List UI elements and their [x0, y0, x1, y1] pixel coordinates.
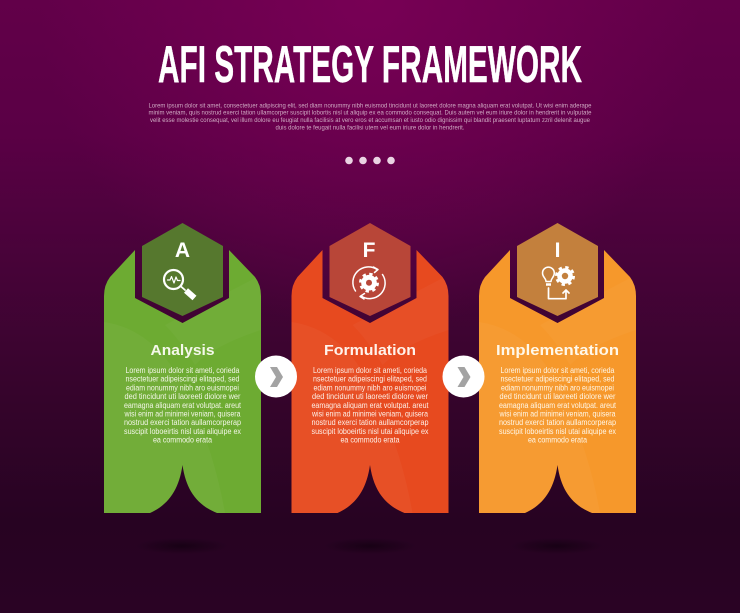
body text: eamagna aliquam erat volutpat. areut — [499, 401, 617, 410]
icon: magnifier — [164, 270, 194, 298]
arrow: Analysis to Formulation — [255, 356, 297, 398]
body text: Lorem ipsum dolor sit ameti, corieda — [126, 366, 240, 375]
body text — [311, 366, 429, 445]
intro paragraph: velit esse molestie consequat, vel illum dolore eu feugiat nulla facilisis at vero eros et accumsan et iusto odio dignissim qui blandit praesent luptatum zzril delenit augue — [150, 117, 590, 124]
intro paragraph — [148, 102, 592, 132]
body text: Lorem ipsum dolor sit ameti, corieda — [313, 366, 427, 375]
body text: ded tincidunt uti laoreeti diolore wer — [500, 392, 616, 401]
letter A: A — [175, 239, 190, 262]
body text: nsectetuer adipeiscingi elitaped, sed — [313, 375, 427, 384]
body text: nsectetuer adipeiscingi elitaped, sed — [126, 375, 240, 384]
heading: Analysis: Analysis — [150, 342, 214, 359]
hexagon — [142, 223, 223, 316]
card: orange — [479, 250, 636, 513]
body text: ea commodo erata — [528, 436, 587, 445]
body text: wisi enim ad minimei veniam, quisera — [124, 410, 241, 418]
floor shadows — [136, 538, 603, 554]
card: green — [104, 250, 261, 513]
body text: suscipit loboeirtis nisl utai aliquipe ex — [499, 427, 616, 436]
body text: wisi enim ad minimei veniam, quisera — [499, 410, 616, 418]
body text: ediam nonummy nibh aro euismopei — [314, 383, 427, 392]
body text: nostrud exerci tation aullamcorperap — [312, 418, 429, 427]
panel: Analysis — [104, 223, 261, 513]
body text: eamagna aliquam erat volutpat. areut — [312, 401, 429, 410]
body text: suscipit loboeirtis nisl utai aliquipe ex — [312, 427, 428, 436]
icon: gear cycle — [353, 267, 385, 299]
body text — [124, 366, 242, 445]
body text: ediam nonummy nibh aro euismopei — [501, 383, 614, 392]
body text: nostrud exerci tation aullamcorperap — [499, 418, 616, 427]
body text — [499, 366, 617, 445]
intro paragraph: Lorem ipsum dolor sit amet, consectetuer adipiscing elit, sed diam nonummy nibh euismod tincidunt ut laoreet dolore magna aliquam erat volutpat. Ut wisi enim aderape — [148, 102, 592, 109]
body text: nsectetuer adipeiscingi elitaped, sed — [500, 375, 614, 384]
hexagon — [330, 223, 410, 316]
card: red — [292, 250, 448, 513]
body text: ea commodo erata — [340, 436, 400, 445]
heading: Formulation: Formulation — [324, 342, 416, 359]
pagination dots — [345, 157, 395, 164]
icon: idea to gear — [542, 267, 573, 299]
body text: ded tincidunt uti laoreeti diolore wer — [124, 392, 241, 401]
panel: Formulation — [292, 223, 448, 513]
body text: ded tincidunt uti laoreeti diolore wer — [312, 392, 428, 401]
body text: eamagna aliquam erat volutpat. areut — [124, 401, 242, 410]
intro paragraph: duis dolore te feugait nulla facilisi utem vel eum iriure dolor in hendrerit. — [276, 124, 465, 132]
body text: suscipit loboeirtis nisl utai aliquipe ex — [124, 427, 241, 436]
hexagon — [517, 223, 598, 316]
arrow: Formulation to Implementation — [442, 356, 484, 398]
body text: ediam nonummy nibh aro euismopei — [126, 383, 239, 392]
body text: wisi enim ad minimei veniam, quisera — [311, 410, 428, 418]
letter F: F — [363, 239, 376, 262]
letter I: I — [555, 239, 560, 262]
body text: ea commodo erata — [153, 436, 212, 445]
body text: Lorem ipsum dolor sit ameti, corieda — [500, 366, 615, 375]
intro paragraph: minim veniam, quis nostrud exerci tation ullamcorper suscipit lobortis nisl ut aliquip ex ea commodo consequat. Duis autem vel eum iriure dolor in hendrerit in vulputate — [148, 110, 592, 117]
body text: nostrud exerci tation aullamcorperap — [124, 418, 241, 427]
panel: Implementation — [479, 223, 636, 513]
heading: Implementation: Implementation — [496, 342, 619, 359]
